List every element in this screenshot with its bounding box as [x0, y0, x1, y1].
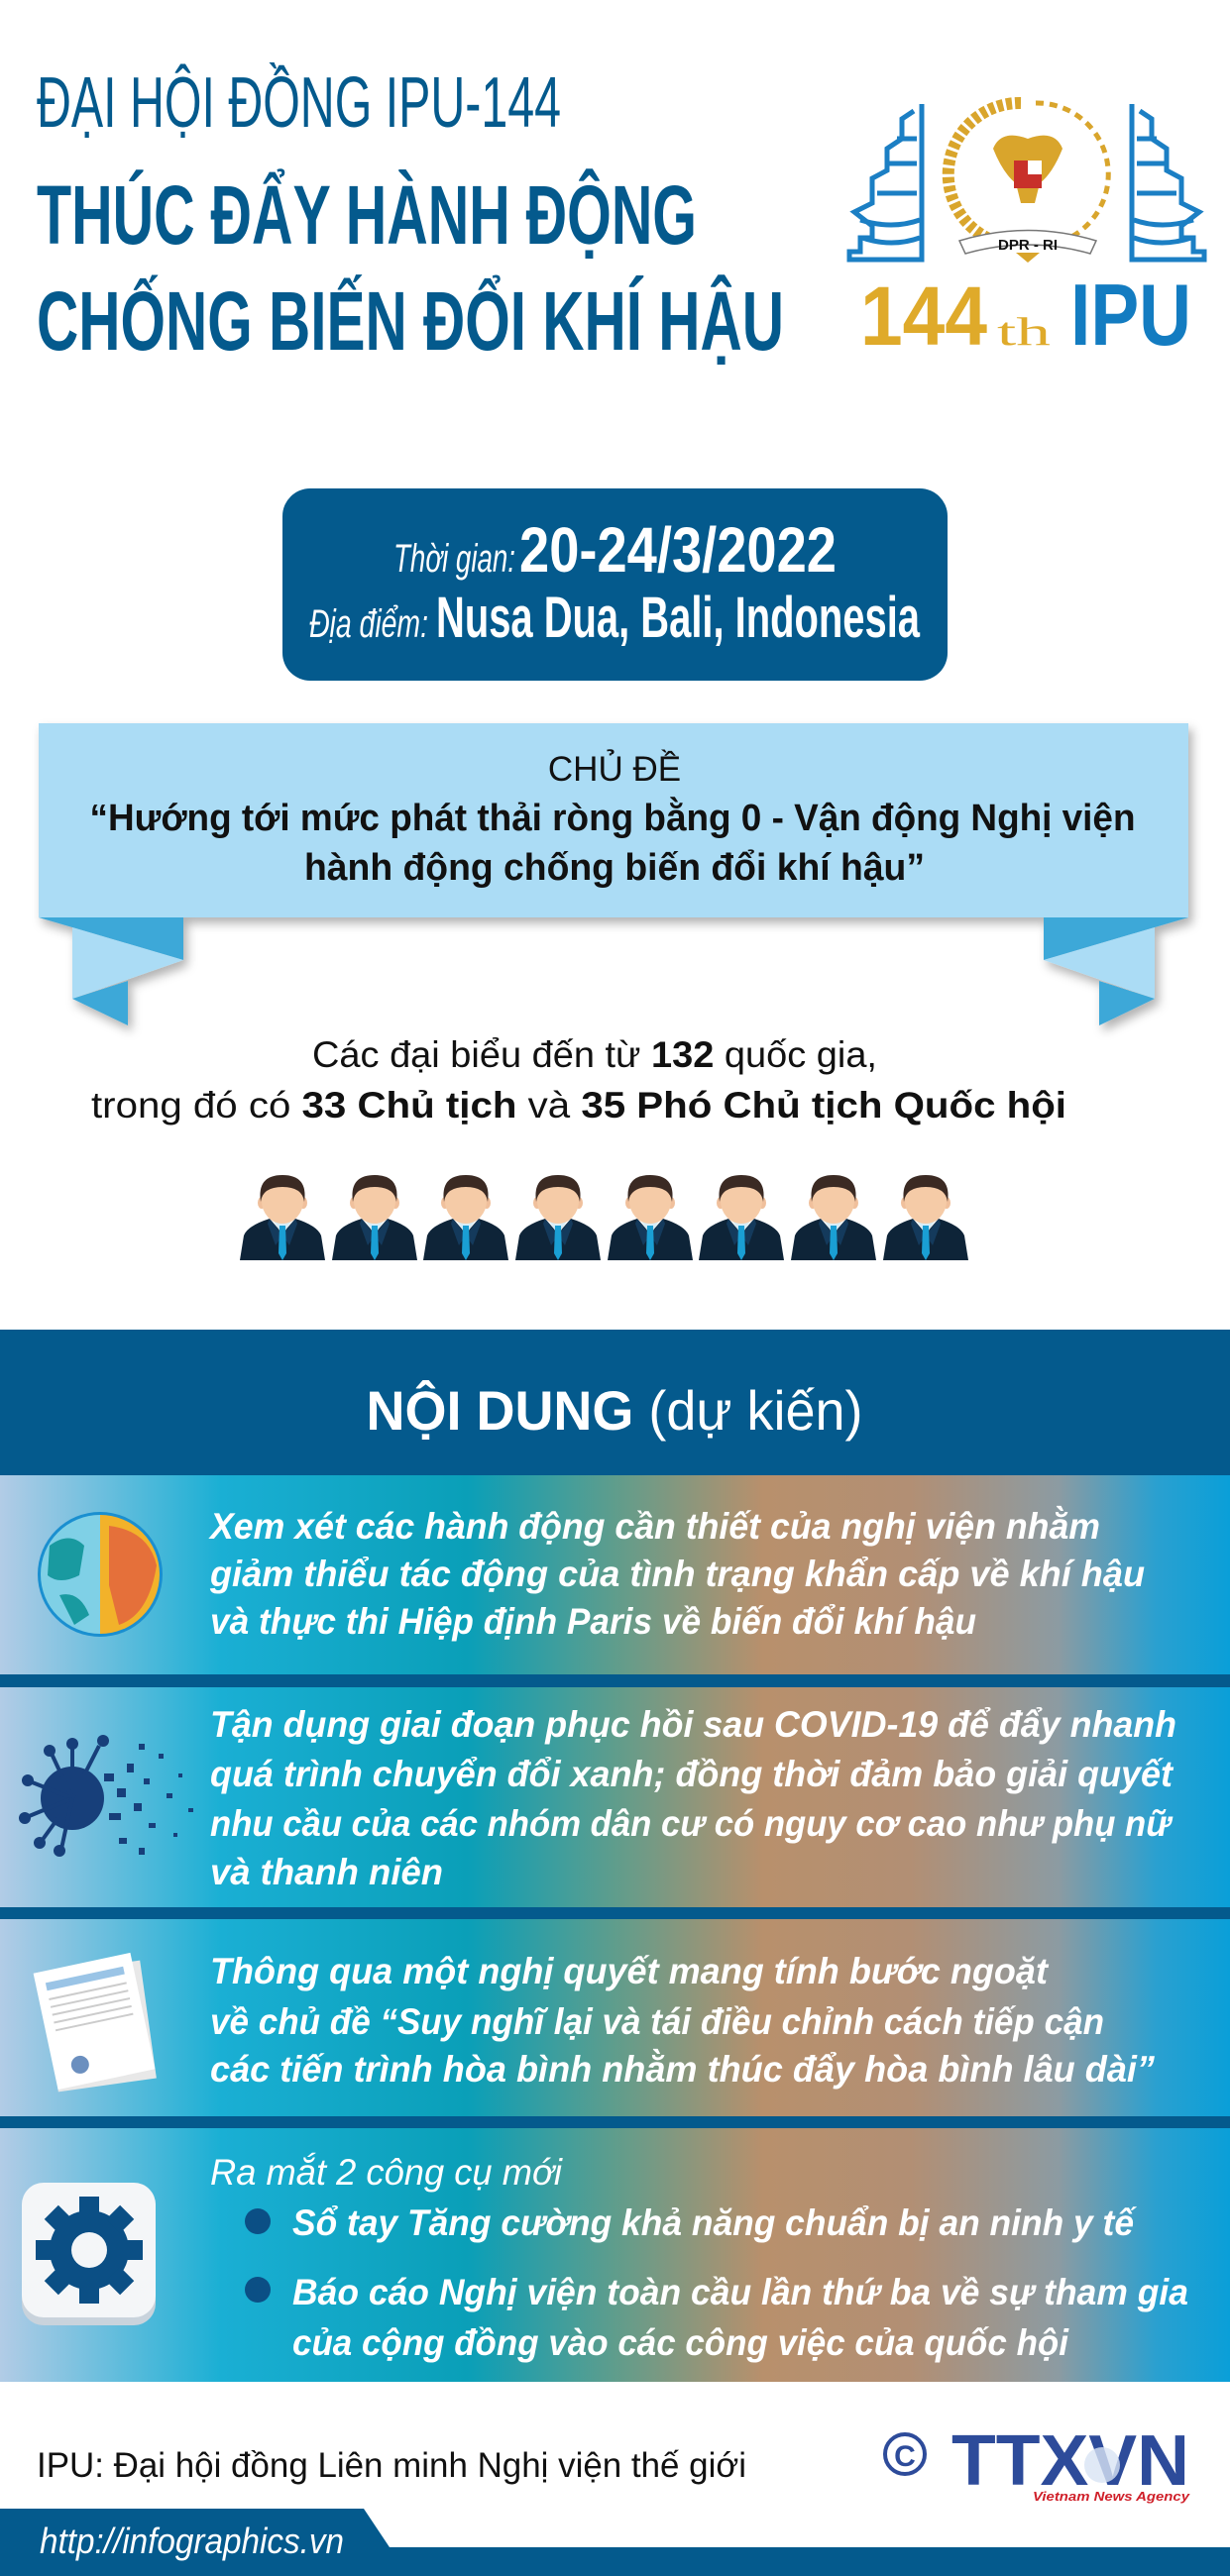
text: time: Thời gian: [393, 537, 515, 581]
text: 144th IPU: th [997, 309, 1051, 354]
logo: TTXVN: Vietnam News Agency [1033, 2489, 1190, 2504]
text: item 3 [210, 1951, 1155, 2090]
panel: content section [0, 1330, 1230, 2382]
heading: NỘI DUNG: NỘI DUNG (dự kiến) [367, 1379, 862, 1442]
row 2: covid [0, 1687, 1230, 1907]
text: theme: “Hướng tới mức phát thải ròng bằng 0 - Vận động Nghị viện [89, 796, 1136, 839]
text: time [393, 514, 837, 586]
text: delegates [91, 1034, 1066, 1126]
title: subtitle line: ĐẠI HỘI ĐỒNG IPU-144 [37, 62, 561, 143]
icon: left ornament [849, 104, 922, 260]
text: item 2: quá trình chuyển đổi xanh; đồng thời đảm bảo giải quyết [210, 1754, 1174, 1794]
text: theme: CHỦ ĐỀ [548, 749, 681, 789]
footer: url bar [0, 2509, 1230, 2576]
text: place: Nusa Dua, Bali, Indonesia [436, 586, 921, 650]
row 4: new tools [0, 2128, 1230, 2382]
text: item 3: Thông qua một nghị quyết mang tính bước ngoặt [210, 1951, 1050, 1991]
text: theme: hành động chống biến đổi khí hậu” [304, 847, 925, 889]
title: main heading: CHỐNG BIẾN ĐỔI KHÍ HẬU [37, 274, 784, 368]
text: item 1: và thực thi Hiệp định Paris về biến đổi khí hậu [210, 1601, 976, 1642]
text: item 2: nhu cầu của các nhóm dân cư có nguy cơ cao như phụ nữ [210, 1803, 1173, 1844]
row 3: resolution [0, 1919, 1230, 2116]
bullet: tool 2: của cộng đồng vào các công việc của quốc hội [292, 2322, 1069, 2363]
text: time: 20-24/3/2022 [519, 514, 837, 586]
text: item 3: về chủ đề “Suy nghĩ lại và tái điều chỉnh cách tiếp cận [210, 2001, 1104, 2042]
text: item 2 [210, 1704, 1176, 1892]
text: item 1: Xem xét các hành động cần thiết của nghị viện nhằm [208, 1505, 1100, 1547]
text: item 1 [208, 1505, 1145, 1642]
text: item 2: Tận dụng giai đoạn phục hồi sau COVID-19 để đẩy nhanh [210, 1704, 1176, 1745]
icon: gear [14, 2175, 165, 2325]
text: delegates: Các đại biểu đến từ 132 quốc gia, [312, 1034, 877, 1075]
logo: TTXVN: C [894, 2440, 916, 2473]
footer: url bar: http://infographics.vn [40, 2521, 344, 2561]
bullet: tool 2: Báo cáo Nghị viện toàn cầu lần thứ ba về sự tham gia [292, 2272, 1188, 2312]
icon: document [34, 1953, 157, 2092]
text: item 1: giảm thiểu tác động của tình trạng khẩn cấp về khí hậu [209, 1554, 1145, 1594]
bullet: tool 2 [245, 2272, 1188, 2363]
text: item 3: các tiến trình hòa bình nhằm thúc đẩy hòa bình lâu dài” [210, 2048, 1155, 2090]
panel: time and place [282, 488, 948, 681]
icons: delegates row [240, 1175, 968, 1260]
text: item 2: và thanh niên [210, 1852, 443, 1892]
icon: virus [19, 1735, 193, 1857]
text: item 4 heading: Ra mắt 2 công cụ mới [210, 2152, 564, 2193]
text: place [309, 586, 921, 650]
title: main heading [37, 168, 784, 368]
logo: 144th IPU [849, 103, 1204, 364]
icon: DPR emblem: DPR - RI [998, 237, 1058, 254]
text: delegates: trong đó có 33 Chủ tịch và 35 Phó Chủ tịch Quốc hội [91, 1085, 1066, 1126]
bullet: tool 1: Sổ tay Tăng cường khả năng chuẩn bị an ninh y tế [292, 2202, 1137, 2243]
footnote: IPU definition: IPU: Đại hội đồng Liên minh Nghị viện thế giới [37, 2446, 746, 2485]
ribbon: theme banner [39, 723, 1188, 1025]
icon: right ornament [1132, 104, 1204, 260]
row 1: climate [0, 1475, 1230, 1674]
icon: DPR emblem [949, 103, 1108, 263]
text: theme [89, 749, 1136, 889]
title: main heading: THÚC ĐẨY HÀNH ĐỘNG [37, 168, 697, 262]
icon: globe [38, 1512, 163, 1637]
text: 144th IPU: IPU [1070, 266, 1191, 364]
text: place: Địa điểm: [309, 602, 428, 646]
text: 144th IPU: 144 [860, 269, 987, 363]
text: 144th IPU [860, 266, 1191, 364]
logo: TTXVN: TTXVN [951, 2421, 1189, 2501]
